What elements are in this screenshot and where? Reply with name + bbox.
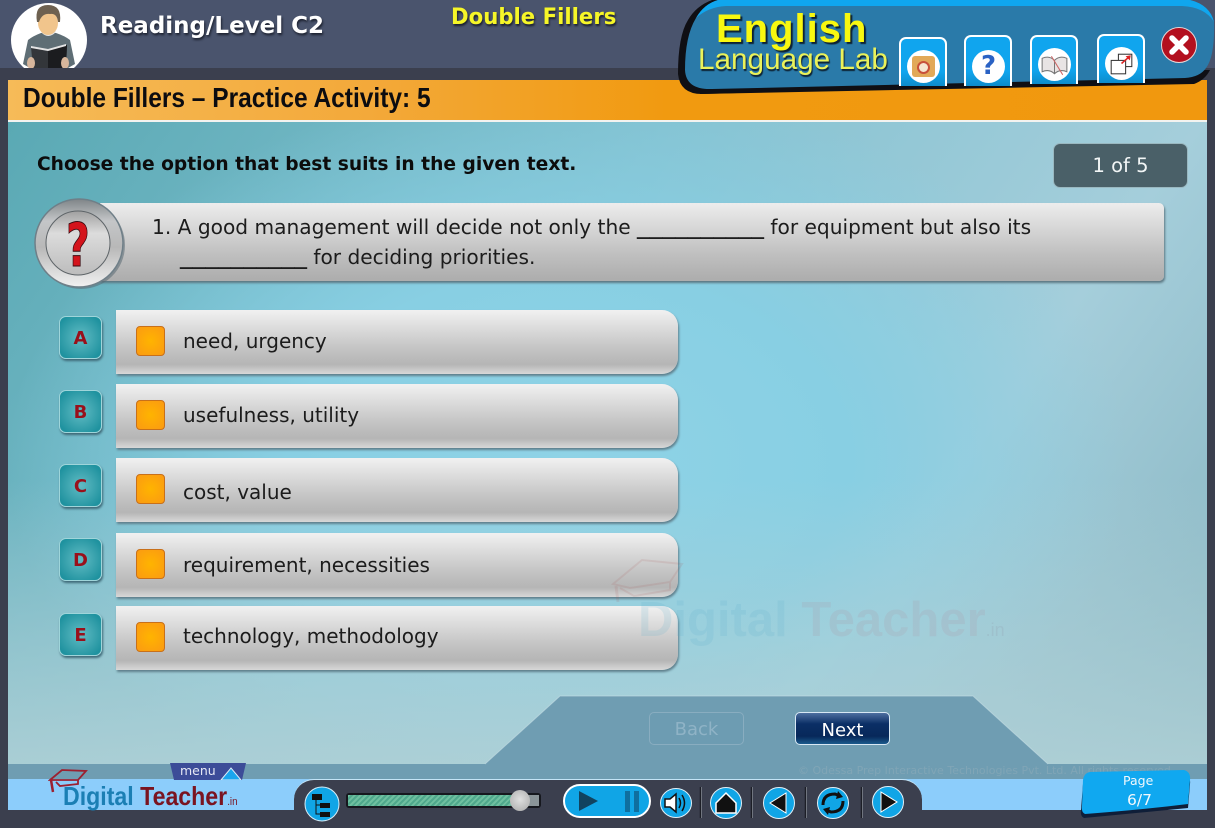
control bar bbox=[294, 779, 922, 828]
option C: cost, value bbox=[183, 480, 292, 504]
orange title bar bbox=[8, 80, 1207, 122]
close button bbox=[1161, 27, 1197, 63]
option A key: A bbox=[74, 328, 87, 349]
heading: level: Reading/Level C2 bbox=[100, 13, 324, 39]
slider knob bbox=[510, 790, 530, 811]
tab: window icon bbox=[1097, 34, 1145, 83]
menu label: menu bbox=[180, 763, 216, 778]
option D: requirement, necessities bbox=[183, 553, 430, 577]
option E key: E bbox=[74, 625, 87, 646]
question counter bbox=[1053, 143, 1188, 188]
watermark text: Digital Teacher.in bbox=[638, 593, 1005, 647]
slider fill bbox=[348, 795, 518, 806]
navigation trapezoid panel bbox=[8, 696, 1207, 779]
English Language Lab header panel bbox=[678, 0, 1214, 94]
logo: Language Lab: Language Lab bbox=[698, 43, 888, 76]
icon: folder with clock bbox=[907, 50, 940, 83]
option C bbox=[116, 458, 678, 522]
icon: open book bbox=[1038, 48, 1071, 81]
option C key bbox=[59, 464, 102, 507]
control separators bbox=[700, 787, 863, 818]
option A bbox=[116, 310, 678, 374]
icon: play bbox=[579, 791, 598, 811]
slider track end bbox=[518, 795, 539, 806]
tab: book icon bbox=[1030, 35, 1078, 84]
logo: Digital Teacher: Digital Teacher.in bbox=[63, 781, 238, 811]
option A key bbox=[59, 316, 102, 359]
tab: history icon bbox=[899, 37, 947, 86]
title: Double Fillers – Practice Activity: 5 bbox=[23, 82, 431, 113]
icon: question mark bbox=[972, 50, 1005, 83]
option E key bbox=[59, 613, 102, 656]
copyright text: © Odessa Prep Interactive Technologies Pvt. Ltd. All rights reserved bbox=[798, 764, 1171, 777]
logo: English: English bbox=[716, 7, 867, 51]
watermark hat bbox=[611, 559, 684, 602]
instruction text: Choose the option that best suits in the given text. bbox=[37, 154, 576, 175]
question panel bbox=[100, 203, 1164, 281]
icon: refresh button bbox=[817, 787, 849, 819]
page label: Page bbox=[1123, 773, 1153, 788]
option D bbox=[116, 533, 678, 597]
logo: Digital Teacher bbox=[48, 769, 238, 811]
icon: pause bbox=[625, 791, 639, 812]
main content background bbox=[8, 122, 1207, 779]
watermark: Digital Teacher bbox=[611, 559, 1005, 647]
icon: question mark: ? bbox=[981, 51, 996, 81]
lower light background sheen bbox=[8, 480, 1207, 765]
icon: speaker button bbox=[660, 788, 692, 818]
option C key: C bbox=[74, 476, 87, 497]
page indicator bbox=[1080, 770, 1190, 818]
icon: next button bbox=[872, 786, 904, 818]
top header band bbox=[0, 0, 1215, 68]
back button (disabled): Back bbox=[675, 719, 718, 740]
next button: Next bbox=[822, 720, 863, 741]
icon: home button bbox=[710, 787, 742, 819]
icon: tree menu button bbox=[304, 786, 340, 822]
question counter: 1 of 5 bbox=[1092, 154, 1148, 177]
option D key bbox=[59, 538, 102, 581]
icon: previous button bbox=[763, 787, 795, 819]
back button (disabled) bbox=[649, 712, 744, 745]
tab: help icon bbox=[964, 35, 1012, 86]
menu tab bbox=[170, 763, 246, 780]
option E: technology, methodology bbox=[183, 624, 439, 648]
option D key: D bbox=[73, 550, 88, 571]
play and pause pill bbox=[563, 784, 651, 818]
page number: 6/7 bbox=[1127, 791, 1152, 809]
footer light band bbox=[8, 779, 1207, 810]
option B: usefulness, utility bbox=[183, 403, 359, 427]
option B key bbox=[59, 390, 102, 433]
next button bbox=[795, 712, 890, 745]
option E bbox=[116, 606, 678, 670]
option B bbox=[116, 384, 678, 448]
avatar: student reading bbox=[11, 3, 87, 68]
option B key: B bbox=[74, 402, 87, 423]
icon: popup window bbox=[1105, 47, 1138, 80]
question line 2: __________ for deciding priorities. bbox=[180, 239, 535, 269]
heading: topic: Double Fillers bbox=[451, 5, 616, 30]
question line 1: 1. A good management will decide not only the __________ for equipment but also its bbox=[152, 209, 1031, 239]
icon: silver question badge: ? bbox=[66, 211, 90, 281]
option A: need, urgency bbox=[183, 329, 327, 353]
icon: silver question badge bbox=[34, 198, 125, 289]
progress slider bbox=[346, 793, 541, 808]
